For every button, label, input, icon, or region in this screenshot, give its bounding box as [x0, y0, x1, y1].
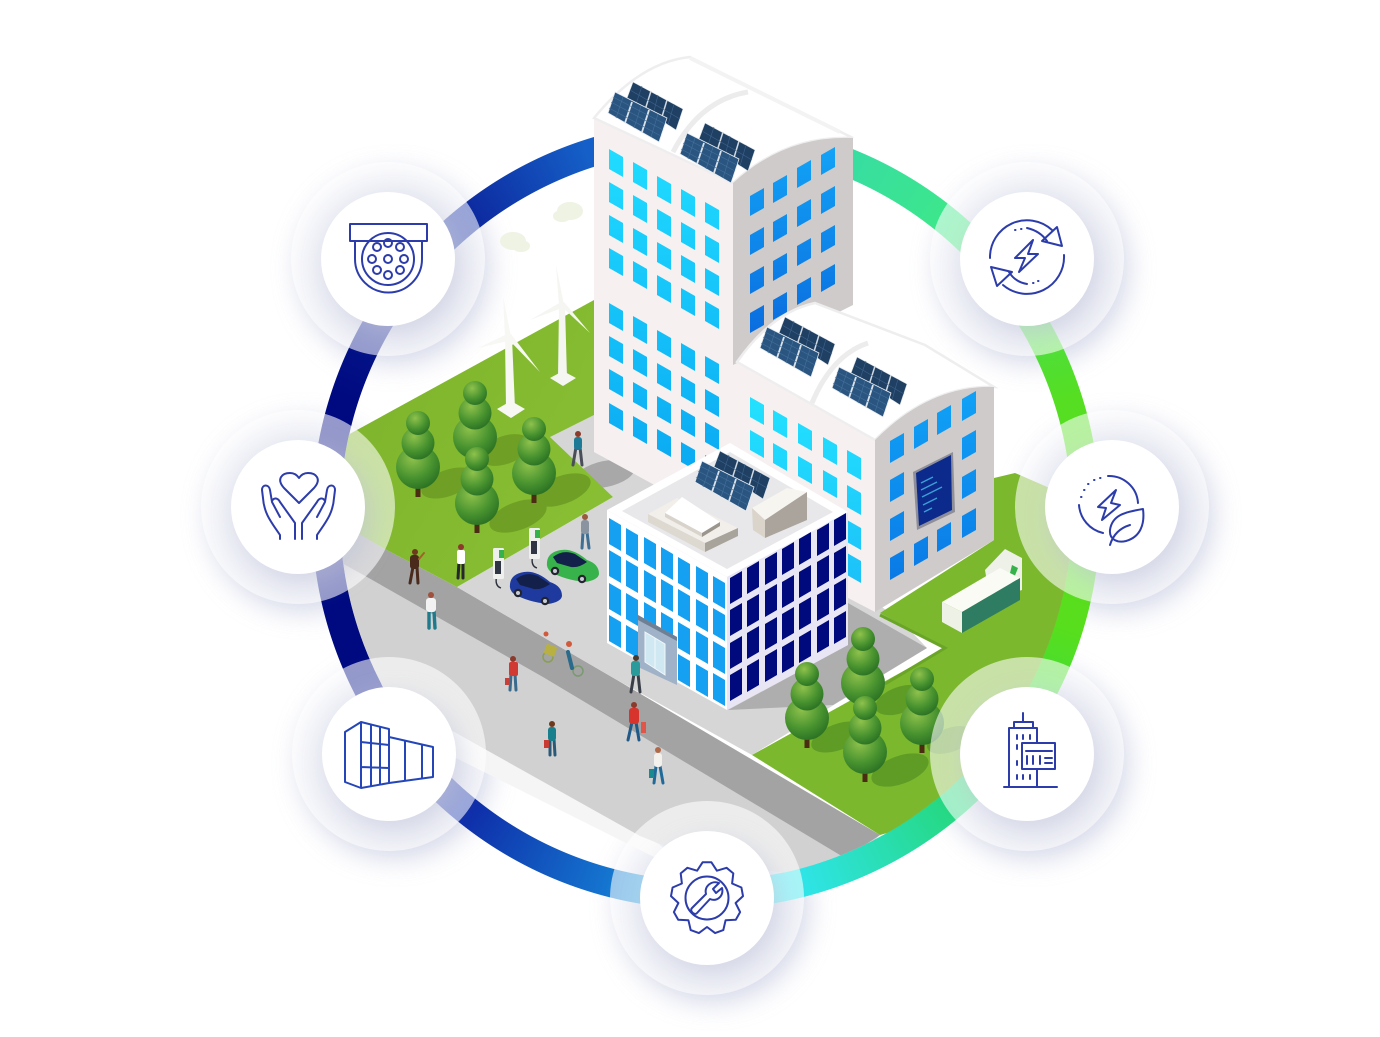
pale walkway edge [382, 684, 662, 857]
blue car [510, 572, 562, 605]
solar panels tall building [608, 82, 755, 183]
windows left lower [609, 303, 719, 483]
left wall [594, 118, 737, 530]
windows left [750, 397, 861, 583]
wind turbine far [530, 265, 590, 386]
energy storage box [942, 549, 1022, 633]
main illustration [204, 56, 1209, 995]
building shadow [583, 460, 633, 488]
roof [594, 57, 853, 183]
windows left [609, 518, 725, 706]
left wall [737, 362, 875, 612]
icon: energy cycle [990, 220, 1064, 294]
plaza [457, 405, 927, 755]
plaza shadow [728, 603, 927, 710]
windows left upper [609, 149, 719, 329]
inner white circles [231, 192, 1179, 965]
icon: office tower [1004, 713, 1057, 787]
clouds [500, 202, 583, 252]
solar panels middle building [760, 317, 907, 417]
cyclists [543, 632, 583, 676]
dark road [340, 522, 880, 858]
windows right [730, 513, 846, 701]
poster [913, 452, 955, 530]
inner circle shadows [238, 202, 1184, 973]
tree shadows right [807, 679, 977, 793]
wind turbine near [478, 296, 540, 418]
right wall [733, 138, 853, 365]
lawn border [880, 615, 945, 684]
infographic stage [198, 56, 1224, 1013]
sidewalk [335, 555, 880, 880]
node halos [201, 162, 1209, 995]
small glass building [607, 443, 848, 710]
roof [737, 303, 994, 440]
green car [547, 550, 599, 583]
ground [335, 300, 1100, 880]
gradient ring [306, 115, 1106, 915]
middle building [737, 303, 994, 612]
icon: security camera [350, 224, 427, 292]
tree shadows left [417, 428, 595, 539]
icon: hands with heart [262, 473, 335, 539]
service nodes [201, 162, 1209, 995]
icon: gear and wrench [671, 862, 743, 933]
rooftop box [752, 488, 807, 538]
trees right [785, 627, 944, 782]
people [410, 431, 663, 783]
right lawn [752, 473, 1100, 835]
EV chargers [493, 528, 540, 588]
windows right [750, 147, 835, 333]
right wall [875, 387, 994, 612]
tall building [594, 57, 853, 530]
solar panels small building [695, 451, 770, 511]
left lawn [335, 300, 613, 587]
trees left [396, 381, 556, 533]
door [638, 615, 677, 685]
rooftop stepped unit [648, 497, 738, 552]
icon: glass building [345, 722, 433, 788]
icon: green energy leaf [1079, 476, 1143, 545]
windows right [890, 391, 976, 580]
